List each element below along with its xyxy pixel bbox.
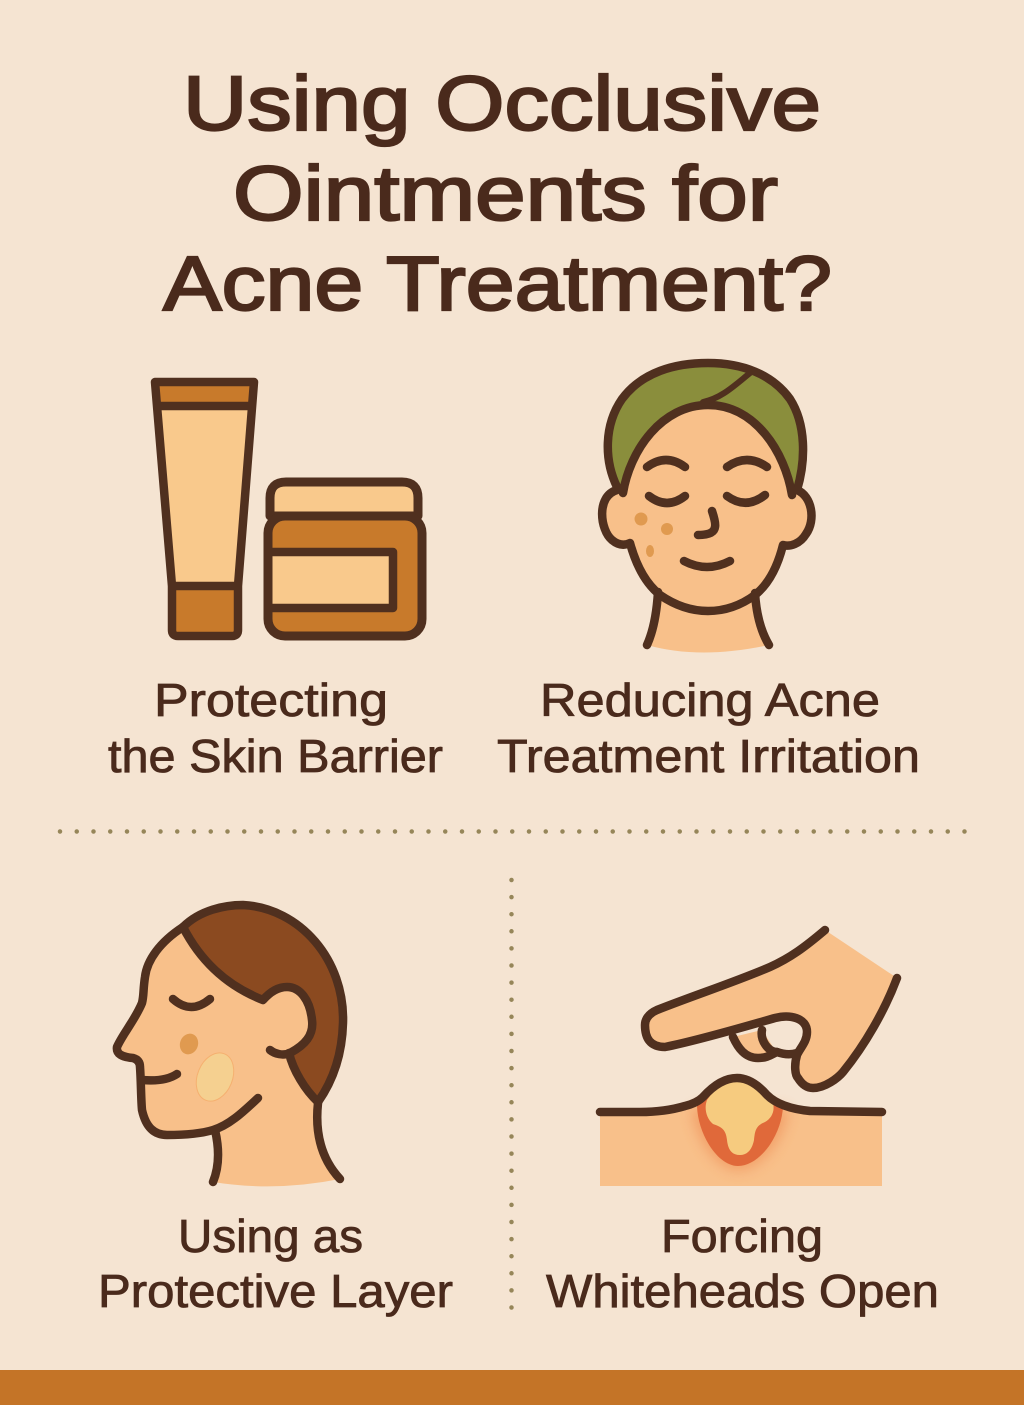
title: Using Occlusive <box>183 61 821 147</box>
icon: finger pressing a whitehead <box>600 930 897 1186</box>
panel: using as protective layer <box>98 905 453 1317</box>
title <box>163 61 832 327</box>
label: reducing acne treatment irritation: Reducing Acne <box>540 674 880 726</box>
footer bar <box>0 1370 1024 1405</box>
title: Acne Treatment? <box>163 241 832 327</box>
label: reducing acne treatment irritation <box>497 674 920 782</box>
inflamed glow <box>692 1108 788 1170</box>
panel: reducing acne treatment irritation <box>497 363 920 782</box>
inflamed pocket <box>697 1078 783 1166</box>
label: using as protective layer: Protective Layer <box>98 1265 453 1317</box>
label: protecting the skin barrier: Protecting <box>154 674 388 726</box>
label: protecting the skin barrier <box>108 674 443 782</box>
label: using as protective layer: Using as <box>178 1210 363 1262</box>
label: forcing whiteheads open: Forcing <box>661 1210 823 1262</box>
skin cross-section <box>600 1078 882 1186</box>
icon: face with headband and acne spots <box>602 363 812 652</box>
label: forcing whiteheads open: Whiteheads Open <box>546 1265 939 1317</box>
label: protecting the skin barrier: the Skin Barrier <box>108 730 443 782</box>
label: reducing acne treatment irritation: Treatment Irritation <box>497 730 920 782</box>
panel: forcing whiteheads open <box>546 930 939 1317</box>
icon: ointment tube and jar <box>155 382 422 636</box>
panel: protecting the skin barrier <box>108 382 443 782</box>
hand <box>645 930 897 1088</box>
whitehead <box>706 1081 774 1155</box>
icon: side profile head with ointment patch <box>117 905 343 1186</box>
divider: vertical dotted line <box>509 880 514 1310</box>
label: forcing whiteheads open <box>546 1210 939 1317</box>
divider: horizontal dotted line <box>60 829 966 834</box>
label: using as protective layer <box>98 1210 453 1317</box>
title: Ointments for <box>233 151 778 237</box>
